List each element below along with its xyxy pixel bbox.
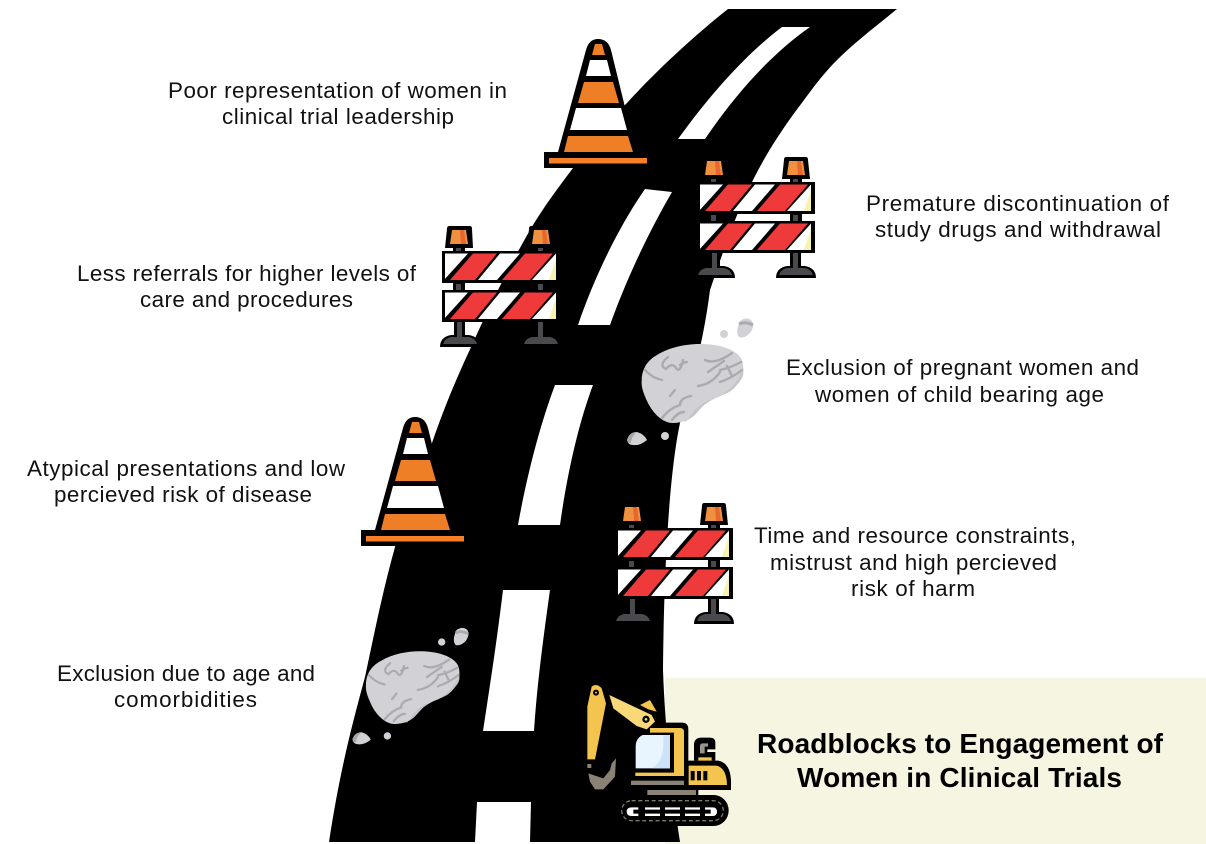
title: Women in Clinical Trials	[797, 762, 1122, 793]
text: exclusion of pregnant women	[786, 355, 1139, 407]
text: poor representation: Poor representation of women in	[168, 78, 507, 103]
text: exclusion due to age: Exclusion due to age and	[57, 661, 315, 686]
lane dash 5	[475, 802, 531, 842]
text: atypical presentations	[27, 456, 346, 507]
icon: traffic cone middle	[361, 417, 469, 546]
lane dash 3	[518, 385, 593, 525]
icon: barrier left	[440, 226, 561, 347]
icon: barrier top right	[695, 157, 816, 278]
icon: barrier lower	[613, 503, 734, 624]
text: premature discontinuation	[866, 191, 1170, 242]
icon: traffic cone top	[544, 39, 652, 168]
text: exclusion due to age	[57, 661, 315, 712]
title	[757, 728, 1164, 793]
text: exclusion due to age: comorbidities	[114, 687, 257, 712]
text: exclusion of pregnant women: Exclusion of pregnant women and	[786, 355, 1139, 380]
cream title panel	[665, 678, 1206, 844]
lane dash 4	[483, 590, 550, 731]
text: atypical presentations: Atypical presentations and low	[27, 456, 346, 481]
text: atypical presentations: percieved risk of disease	[54, 482, 312, 507]
icon: boulder upper	[627, 318, 753, 445]
icon: excavator	[587, 685, 731, 826]
text: time and resource constraints	[754, 523, 1076, 601]
text: premature discontinuation: Premature discontinuation of	[866, 191, 1170, 216]
text: less referrals: Less referrals for higher levels of	[77, 261, 417, 286]
lane dash 1	[678, 27, 810, 139]
text: exclusion of pregnant women: women of child bearing age	[814, 382, 1104, 407]
text: poor representation: clinical trial leadership	[222, 104, 454, 129]
text: poor representation	[168, 78, 507, 129]
text: time and resource constraints: Time and resource constraints,	[754, 523, 1076, 548]
text: time and resource constraints: risk of harm	[851, 576, 975, 601]
icon: boulder lower	[352, 628, 468, 744]
text: less referrals: care and procedures	[140, 287, 353, 312]
text: time and resource constraints: mistrust and high percieved	[770, 550, 1057, 575]
text: less referrals	[77, 261, 417, 312]
lane dash 2	[578, 189, 672, 325]
text: premature discontinuation: study drugs and withdrawal	[875, 217, 1161, 242]
road	[329, 9, 897, 842]
title: Roadblocks to Engagement of	[757, 728, 1164, 759]
